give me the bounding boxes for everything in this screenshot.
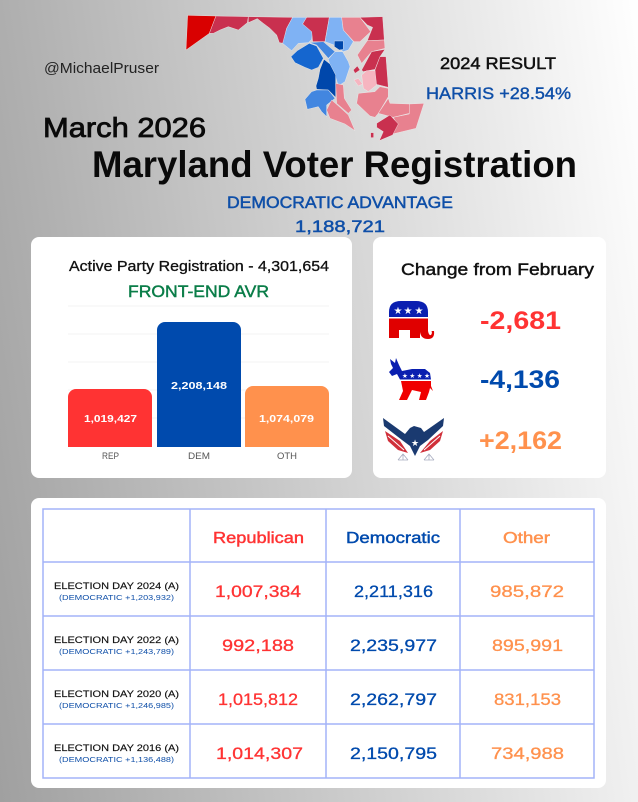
change value: other: +2,162	[479, 427, 562, 455]
table row: 2022: 2,235,977	[350, 636, 437, 655]
table row: 2016: 734,988	[491, 744, 564, 763]
table row: 2020	[54, 689, 561, 710]
bar: OTH: OTH	[277, 451, 297, 461]
table header: Republican	[213, 530, 304, 547]
bar: REP: 1,019,427	[84, 414, 138, 425]
table row: 2016: 1,014,307	[216, 744, 303, 763]
panel: change from February	[373, 237, 606, 478]
table row: 2016: ELECTION DAY 2016 (A)	[54, 743, 179, 754]
table row: 2020: 1,015,812	[218, 690, 298, 709]
table row: 2024: 2,211,316	[354, 582, 433, 601]
table row: 2024: (DEMOCRATIC +1,203,932)	[59, 593, 175, 602]
change value: republican: -2,681	[480, 307, 561, 335]
democratic advantage value: 1,188,721	[295, 217, 385, 236]
bar chart	[68, 322, 329, 461]
bar: OTH	[245, 386, 329, 461]
table header: Democratic	[346, 530, 440, 547]
icon: democratic donkey	[389, 358, 433, 400]
table row: 2022: 895,991	[492, 636, 563, 655]
bar: DEM: 2,208,148	[171, 381, 228, 392]
panel heading: Change from February	[401, 260, 595, 279]
panel subheading: FRONT-END AVR	[128, 282, 269, 301]
table row: 2020: ELECTION DAY 2020 (A)	[54, 689, 179, 700]
table row: 2022: 992,188	[222, 636, 294, 655]
table row: 2024: 1,007,384	[215, 582, 301, 601]
2024 result value: HARRIS +28.54%	[426, 84, 571, 103]
icon: republican elephant: ★	[404, 306, 413, 317]
2024 result label: 2024 RESULT	[440, 54, 556, 73]
table header: Other	[503, 530, 551, 547]
bar: REP: REP	[102, 451, 119, 461]
table row: 2022: (DEMOCRATIC +1,243,789)	[59, 647, 175, 656]
table row: 2016: 2,150,795	[350, 744, 437, 763]
table row: 2020: 2,262,797	[350, 690, 437, 709]
icon: republican elephant: ★	[394, 306, 403, 317]
map: Maryland counties 2024 result	[186, 15, 424, 141]
panel: active party registration	[31, 237, 352, 478]
panel heading: Active Party Registration - 4,301,654	[69, 259, 329, 275]
bar: DEM: DEM	[188, 451, 210, 461]
table row: 2016	[54, 743, 564, 764]
title: Maryland Voter Registration	[92, 144, 577, 185]
change value: democratic: -4,136	[480, 366, 560, 394]
date heading: March 2026	[43, 112, 206, 143]
table row: 2022	[54, 635, 563, 656]
author handle: @MichaelPruser	[44, 60, 159, 77]
bar: REP	[68, 389, 152, 461]
icon: republican elephant: ★	[415, 306, 424, 317]
table row: 2016: (DEMOCRATIC +1,136,488)	[59, 755, 175, 764]
table header	[213, 530, 551, 547]
panel: historic registration table	[31, 498, 606, 788]
democratic advantage label: DEMOCRATIC ADVANTAGE	[227, 193, 453, 212]
icon: republican elephant	[389, 301, 434, 339]
table row: 2020: 831,153	[494, 690, 561, 709]
table row: 2022: ELECTION DAY 2022 (A)	[54, 635, 179, 646]
icon: eagle	[383, 418, 444, 460]
bar: OTH: 1,074,079	[259, 414, 315, 425]
table row: 2024: ELECTION DAY 2024 (A)	[54, 581, 179, 592]
table row: 2024: 985,872	[490, 582, 564, 601]
table row: 2020: (DEMOCRATIC +1,246,985)	[59, 701, 175, 710]
icon: eagle: ★	[411, 438, 419, 448]
table row: 2024	[54, 581, 564, 602]
icon: democratic donkey: ★★★★	[402, 372, 430, 380]
bar: DEM	[157, 322, 241, 461]
